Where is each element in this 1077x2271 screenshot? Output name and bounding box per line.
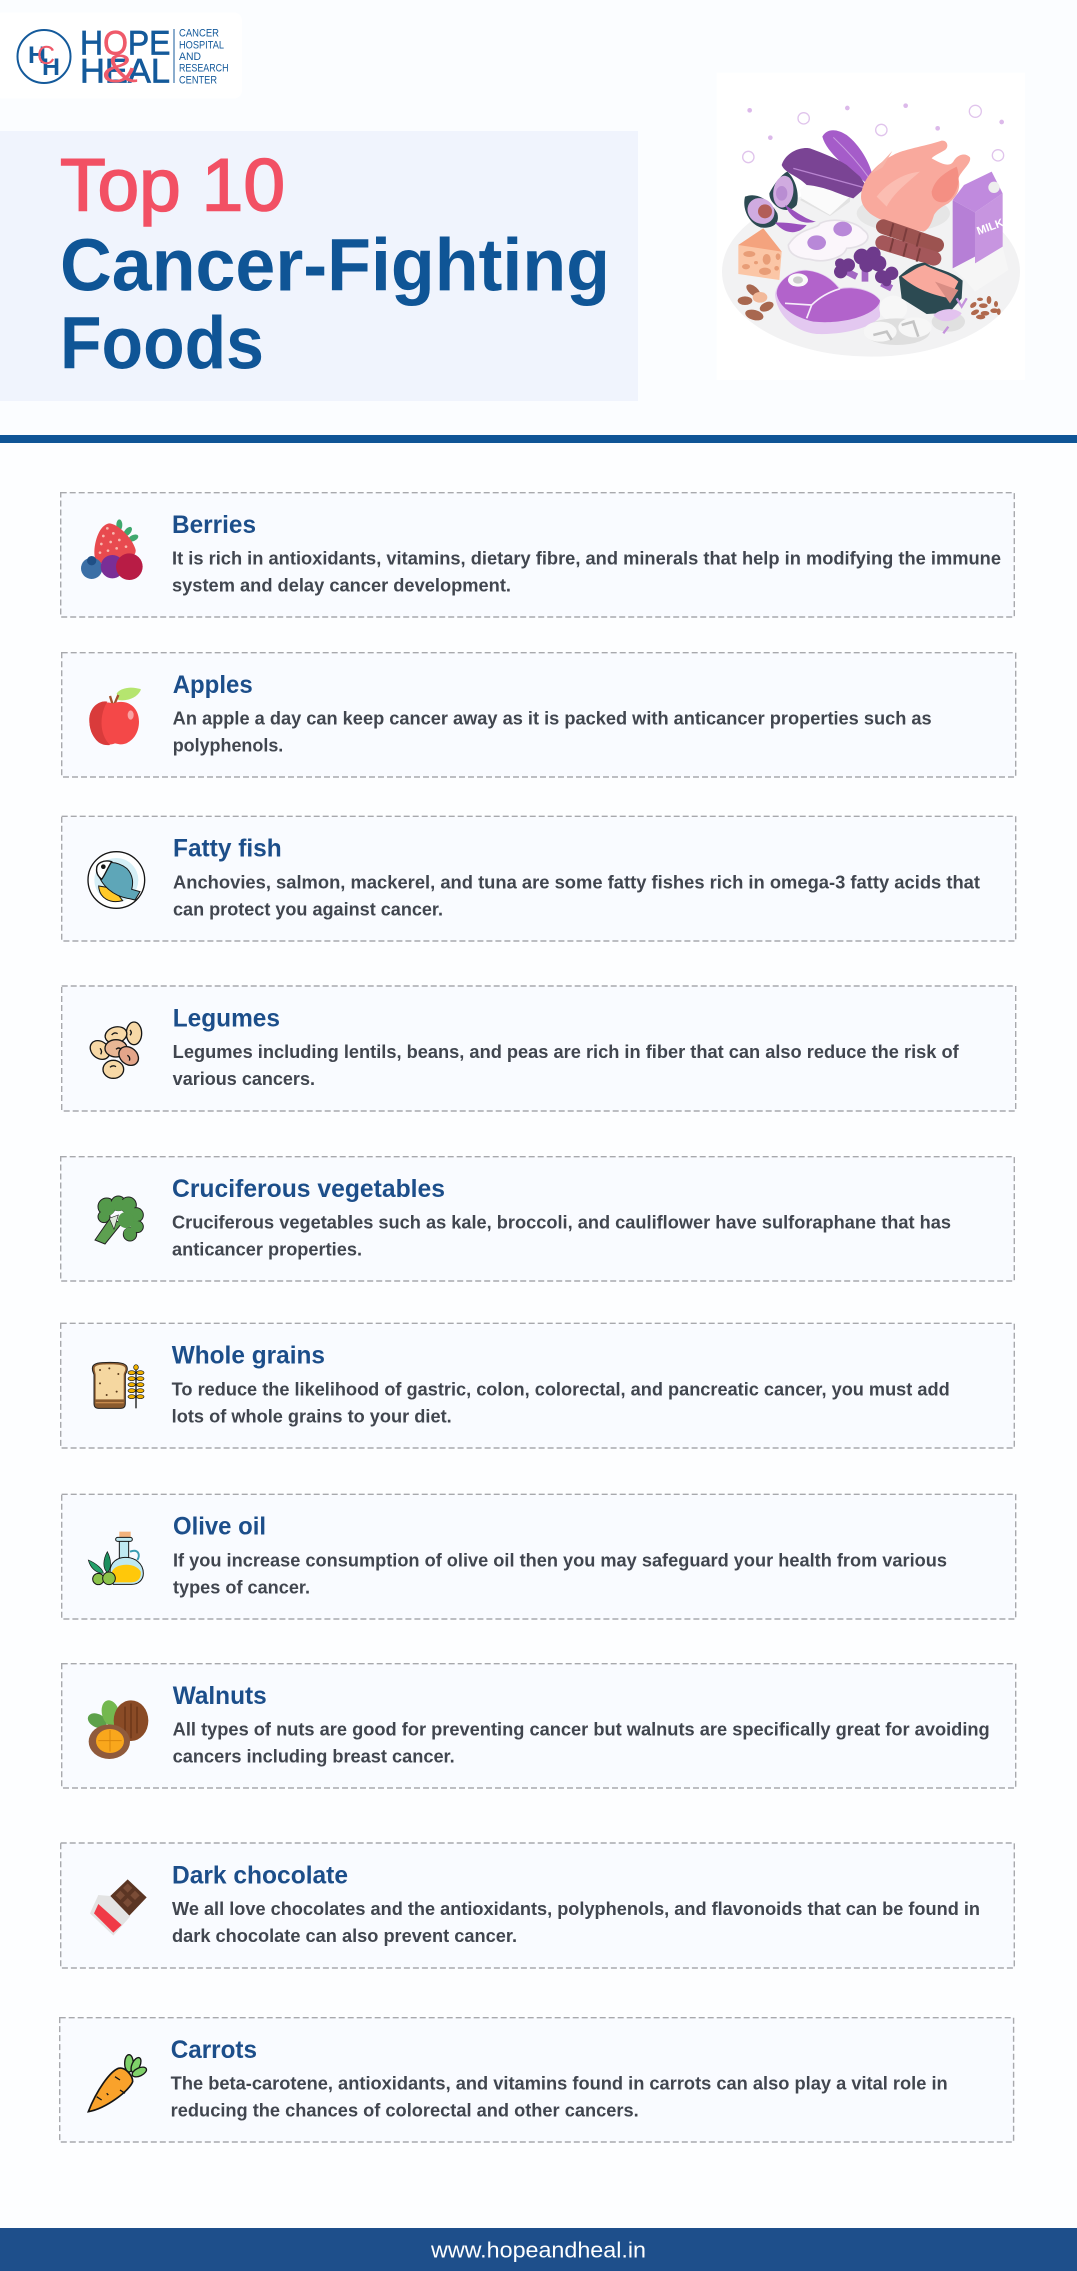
icon: olive oil bottle [88,1532,143,1585]
logo: H [28,42,46,69]
text: berries: system and delay cancer development. [172,576,511,596]
logo: CANCER [179,28,219,40]
title: foods: Foods [60,301,264,384]
text: fatty fish: can protect you against cancer. [173,899,443,919]
text: carrots: reducing the chances of colorectal and other cancers. [171,2101,639,2121]
panel: carrots [60,2018,1014,2142]
text: dark chocolate: We all love chocolates and the antioxidants, polyphenols, and flavonoids that can be found in [172,1899,980,1919]
text: olive oil: If you increase consumption of olive oil then you may safeguard your health from various [173,1550,947,1570]
text: legumes: various cancers. [173,1069,315,1089]
text: carrots [171,2074,948,2121]
icon: beans [86,1022,142,1078]
heading: fatty fish: Fatty fish [173,835,282,863]
heading: berries: Berries [172,511,256,539]
text: legumes: Legumes including lentils, beans, and peas are rich in fiber that can also reduce the risk of [173,1042,960,1062]
illustration: assorted foods on a plate: MILK [975,217,1006,238]
title: top 10: Top 10 [60,144,285,227]
footer bar [0,2228,1077,2271]
text: whole grains: lots of whole grains to your diet. [172,1406,452,1426]
text: cruciferous vegetables: Cruciferous vegetables such as kale, broccoli, and cauliflower have sulforaphane that has [172,1213,951,1233]
panel: berries [61,493,1014,617]
panel: whole grains [61,1323,1014,1448]
illustration: assorted foods on a plate [717,73,1025,380]
panel: legumes [62,986,1016,1111]
text: walnuts: cancers including breast cancer. [173,1747,455,1767]
logo: CENTER [179,74,217,86]
text: fatty fish [173,872,980,919]
footer bar: www.hopeandheal.in [430,2238,646,2263]
heading: cruciferous vegetables: Cruciferous vegetables [172,1175,445,1203]
icon: walnuts [85,1698,148,1759]
panel: olive oil [62,1494,1016,1619]
text: olive oil: types of cancer. [173,1577,310,1597]
text: berries [172,549,1001,596]
text: cruciferous vegetables: anticancer properties. [172,1240,362,1260]
heading: walnuts: Walnuts [173,1682,267,1710]
logo: HOPE [80,24,170,62]
icon: broccoli [95,1196,143,1244]
logo: H [42,54,60,81]
text: apples [173,709,932,756]
logo: AND [179,51,201,63]
panel: fatty fish [62,816,1016,941]
logo: RESEARCH [179,63,229,75]
panel: dark chocolate [61,1843,1014,1968]
text: dark chocolate: dark chocolate can also prevent cancer. [172,1926,517,1946]
heading: whole grains: Whole grains [172,1342,325,1370]
text: apples: polyphenols. [173,736,283,756]
heading: legumes: Legumes [173,1004,280,1032]
text: berries: It is rich in antioxidants, vitamins, dietary fibre, and minerals that help in modifying the immune [172,549,1001,569]
icon: bread and wheat [92,1362,144,1408]
logo: & [102,47,138,91]
text: walnuts [173,1720,990,1767]
text: olive oil [173,1550,947,1597]
heading: olive oil: Olive oil [173,1513,266,1541]
text: whole grains [172,1379,950,1426]
icon: berries [81,519,143,580]
panel: cruciferous vegetables [61,1157,1014,1281]
text: apples: An apple a day can keep cancer away as it is packed with anticancer properties such as [173,709,932,729]
logo: C [37,40,55,70]
logo [0,12,242,98]
title: cancer-fighting: Cancer-Fighting [60,224,610,307]
title panel [0,131,638,401]
text: legumes [173,1042,960,1089]
heading: dark chocolate: Dark chocolate [172,1861,348,1889]
panel: apples [62,653,1016,777]
heading: carrots: Carrots [171,2036,257,2064]
text: walnuts: All types of nuts are good for preventing cancer but walnuts are specifically great for avoiding [173,1720,990,1740]
logo: HOSPITAL [179,39,224,51]
icon: fish on plate [88,852,145,908]
icon: carrot [88,2055,148,2112]
text: whole grains: To reduce the likelihood of gastric, colon, colorectal, and pancreatic cancer, you must add [172,1379,950,1399]
panel: walnuts [62,1664,1016,1788]
logo: HEAL [80,52,170,90]
heading: apples: Apples [173,671,253,699]
text: fatty fish: Anchovies, salmon, mackerel, and tuna are some fatty fishes rich in omega-3 fatty acids that [173,872,980,892]
text: cruciferous vegetables [172,1213,951,1260]
icon: apple [89,688,141,745]
text: dark chocolate [172,1899,980,1946]
text: carrots: The beta-carotene, antioxidants, and vitamins found in carrots can also play a vital role in [171,2074,948,2094]
icon: chocolate bar [90,1879,147,1936]
